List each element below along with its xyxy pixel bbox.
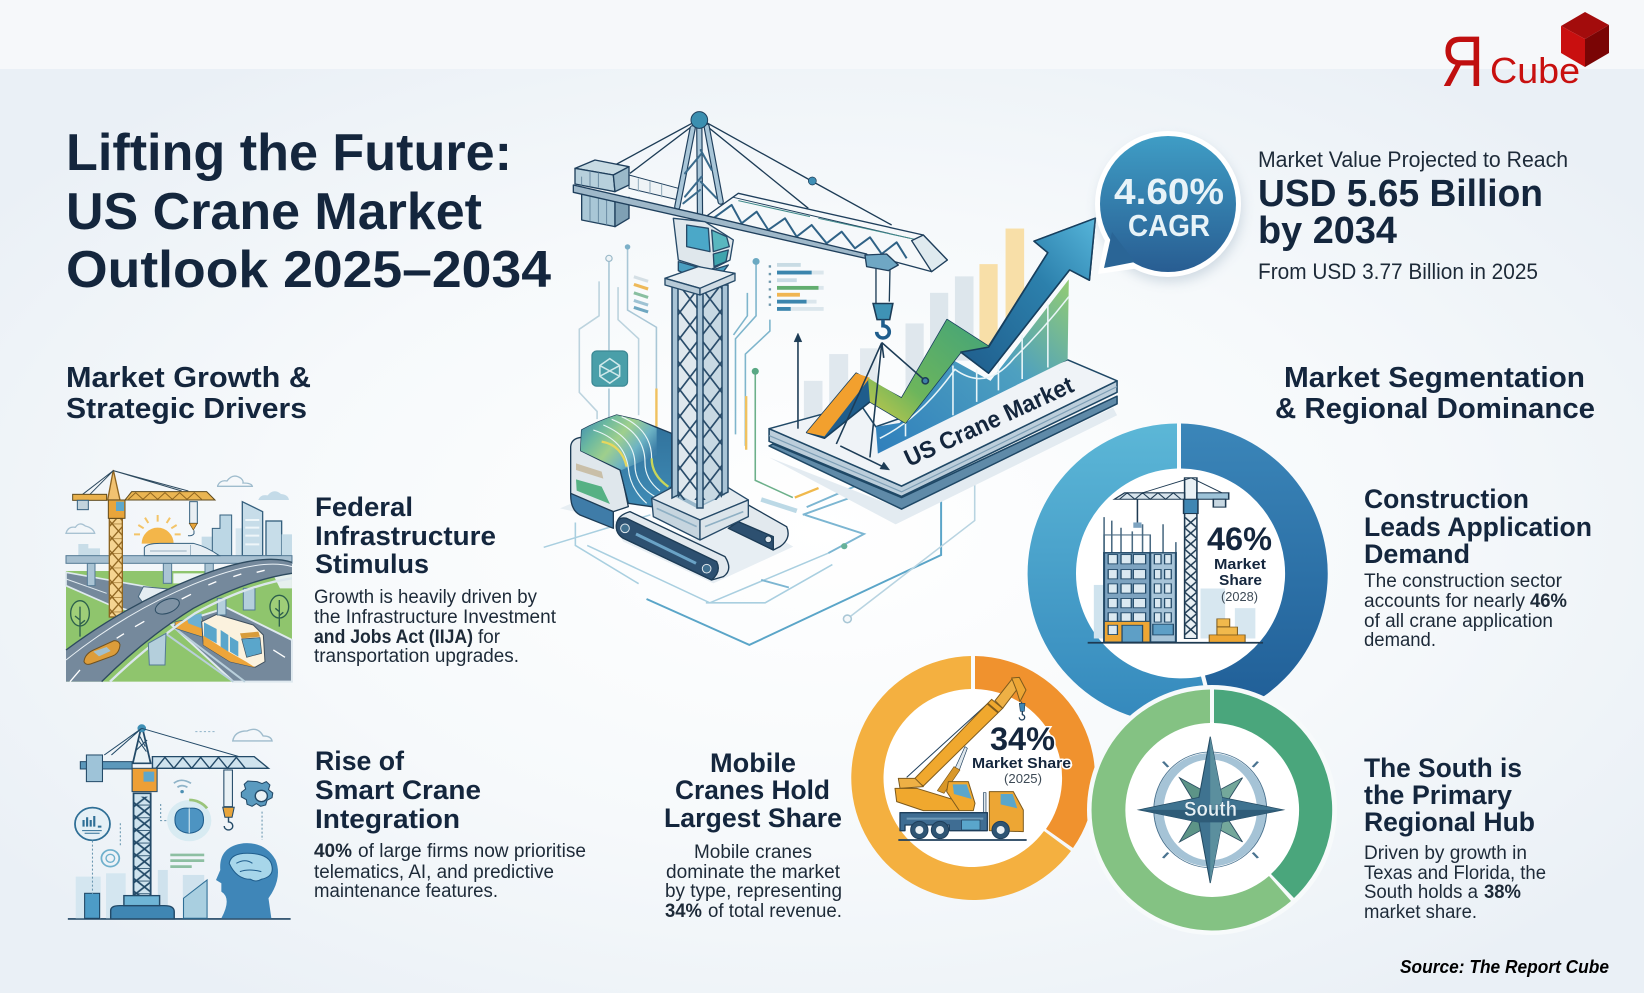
title xyxy=(66,124,551,299)
growth chart platform xyxy=(544,218,1117,645)
donut: south 38%: South xyxy=(1184,798,1237,821)
text block: federal infrastructure stimulus: the Infrastructure Investment xyxy=(314,607,557,628)
callout: CAGR bubble: CAGR xyxy=(1128,208,1210,243)
heading: market segmentation and regional dominance xyxy=(1275,362,1595,425)
source note: Source: The Report Cube xyxy=(1400,957,1609,977)
A-frame xyxy=(677,127,721,213)
text block: federal infrastructure stimulus: Growth is heavily driven by xyxy=(314,587,537,608)
text block: federal infrastructure stimulus: for xyxy=(478,627,501,648)
text block: rise of smart crane integration: 40% xyxy=(314,841,352,862)
logo: RCube xyxy=(1441,12,1609,102)
text block: the south is the primary regional hub: 38% xyxy=(1484,882,1521,903)
callout: CAGR bubble: 4.60% xyxy=(1114,171,1224,212)
text block: federal infrastructure stimulus: and Jobs Act (IIJA) xyxy=(314,627,473,648)
donut: mobile cranes 34%: Market Share xyxy=(972,755,1071,772)
back track xyxy=(728,505,788,550)
text block: mobile cranes hold largest share: Cranes Hold xyxy=(675,775,830,805)
donut: construction 46%: Share xyxy=(1219,572,1262,589)
text block: construction leads application demand: The construction sector xyxy=(1364,571,1563,592)
text block: construction leads application demand: of all crane application xyxy=(1364,611,1553,632)
text block: construction leads application demand: 46% xyxy=(1530,591,1567,612)
text block: rise of smart crane integration: of large firms now prioritise xyxy=(358,841,586,862)
text block: construction leads application demand: Construction xyxy=(1364,484,1529,514)
text block: federal infrastructure stimulus: Federal xyxy=(315,492,413,522)
platform xyxy=(769,360,1117,509)
icon: red cube xyxy=(1561,12,1609,67)
text block: mobile cranes hold largest share: 34% xyxy=(665,901,702,922)
heading: market growth and strategic drivers xyxy=(66,362,311,425)
text block: rise of smart crane integration: telematics, AI, and predictive xyxy=(314,862,554,883)
text block: federal infrastructure stimulus: Infrastructure xyxy=(315,521,496,551)
trees xyxy=(71,601,89,626)
text block: mobile cranes hold largest share: Largest Share xyxy=(664,803,842,833)
text block: market value projection: by 2034 xyxy=(1258,210,1397,252)
illustration: smart crane integration xyxy=(68,724,291,919)
text block: construction leads application demand xyxy=(1364,484,1592,651)
donut: mobile cranes 34%: (2025) xyxy=(1004,771,1042,786)
hook xyxy=(873,304,893,338)
text block: market value projection: USD 5.65 Billion xyxy=(1258,173,1543,215)
heading: market growth and strategic drivers: Strategic Drivers xyxy=(66,393,307,425)
text block: market value projection: From USD 3.77 Billion in 2025 xyxy=(1258,259,1538,284)
text block: construction leads application demand: demand. xyxy=(1364,630,1436,651)
circuit lines xyxy=(544,247,975,645)
bar chart xyxy=(804,229,1024,431)
text block: the south is the primary regional hub: market share. xyxy=(1364,902,1477,923)
cables xyxy=(615,122,892,225)
small bars near crane xyxy=(634,277,648,312)
donut: south 38% xyxy=(1087,685,1337,935)
platform shadow xyxy=(769,408,1117,524)
white van under overpass xyxy=(138,587,168,603)
crawler machine and tracks xyxy=(560,415,793,583)
title: Lifting the Future: xyxy=(66,124,512,182)
donut: construction 46%: 46% xyxy=(1207,521,1272,557)
text block: market value projection xyxy=(1258,147,1568,284)
rising arrow xyxy=(807,218,1095,438)
illustration: federal infrastructure xyxy=(66,470,292,682)
donut: construction 46% xyxy=(1028,424,1328,723)
yellow crane xyxy=(109,518,122,617)
text block: mobile cranes hold largest share xyxy=(664,748,842,922)
text block: rise of smart crane integration: Integration xyxy=(315,804,460,834)
illustration: central tower crane with growth chart xyxy=(544,112,1117,645)
text block: the south is the primary regional hub: Driven by growth in xyxy=(1364,843,1527,864)
heading: market growth and strategic drivers: Market Growth & xyxy=(66,362,311,394)
text block: mobile cranes hold largest share: Mobile xyxy=(710,748,796,778)
text block: construction leads application demand: Demand xyxy=(1364,539,1470,569)
rear deck xyxy=(629,175,678,200)
text block: mobile cranes hold largest share: by type, representing xyxy=(665,881,842,902)
text block: mobile cranes hold largest share: of total revenue. xyxy=(708,901,842,922)
donut: construction 46%: Market xyxy=(1214,556,1266,573)
text block: construction leads application demand: Leads Application xyxy=(1364,512,1592,542)
text block: rise of smart crane integration: Rise of xyxy=(315,746,405,776)
icon: teal chip xyxy=(592,351,628,386)
bus xyxy=(175,617,207,638)
machine body xyxy=(571,415,672,528)
donut: mobile cranes 34%: 34% xyxy=(990,721,1055,757)
ground xyxy=(66,571,292,682)
hook block xyxy=(876,268,890,303)
text block: rise of smart crane integration xyxy=(314,746,586,902)
text block: the south is the primary regional hub xyxy=(1364,753,1546,923)
logo: RCube: Я xyxy=(1441,23,1484,102)
icon: compass xyxy=(1138,737,1284,883)
axis arrows xyxy=(794,333,890,470)
heading: market segmentation and regional dominance: & Regional Dominance xyxy=(1275,393,1595,425)
main beam xyxy=(573,185,868,259)
text block: the south is the primary regional hub: South holds a xyxy=(1364,882,1478,903)
donut: mobile cranes 34% xyxy=(851,656,1095,900)
text block: mobile cranes hold largest share: dominate the market xyxy=(666,862,841,883)
donut: construction 46%: (2028) xyxy=(1221,589,1258,604)
text block: the south is the primary regional hub: Texas and Florida, the xyxy=(1364,863,1546,884)
truss xyxy=(573,185,947,272)
tower mast xyxy=(672,285,728,508)
text block: the south is the primary regional hub: Regional Hub xyxy=(1364,807,1535,837)
crane top: jib, cab and cables xyxy=(573,112,947,303)
text block: federal infrastructure stimulus: Stimulus xyxy=(315,549,429,579)
text block: the south is the primary regional hub: the Primary xyxy=(1364,780,1512,810)
heading: market segmentation and regional dominance: Market Segmentation xyxy=(1284,362,1585,394)
data list xyxy=(770,263,824,311)
front track xyxy=(616,512,729,580)
text block: mobile cranes hold largest share: Mobile cranes xyxy=(694,842,812,863)
text block: market value projection: Market Value Projected to Reach xyxy=(1258,147,1568,172)
elevated road xyxy=(243,588,255,610)
text block: construction leads application demand: accounts for nearly xyxy=(1364,591,1525,612)
label: US Crane Market: US Crane Market xyxy=(900,372,1078,472)
tower base xyxy=(652,487,748,540)
area under arrow xyxy=(876,279,1069,454)
text block: rise of smart crane integration: Smart Crane xyxy=(315,775,481,805)
logo: RCube: Cube xyxy=(1490,50,1580,91)
icon: mobile crane truck xyxy=(895,677,1027,840)
text block: rise of smart crane integration: maintenance features. xyxy=(314,881,498,902)
icon: building and crane xyxy=(1088,478,1263,643)
text block: federal infrastructure stimulus xyxy=(314,492,557,667)
title: US Crane Market xyxy=(66,183,482,241)
callout: CAGR bubble xyxy=(1095,131,1242,282)
title: Outlook 2025–2034 xyxy=(66,241,551,299)
text block: federal infrastructure stimulus: transportation upgrades. xyxy=(314,646,519,667)
counterweight xyxy=(575,160,629,227)
rigging xyxy=(836,343,928,457)
cab xyxy=(665,218,735,295)
text block: the south is the primary regional hub: The South is xyxy=(1364,753,1522,783)
